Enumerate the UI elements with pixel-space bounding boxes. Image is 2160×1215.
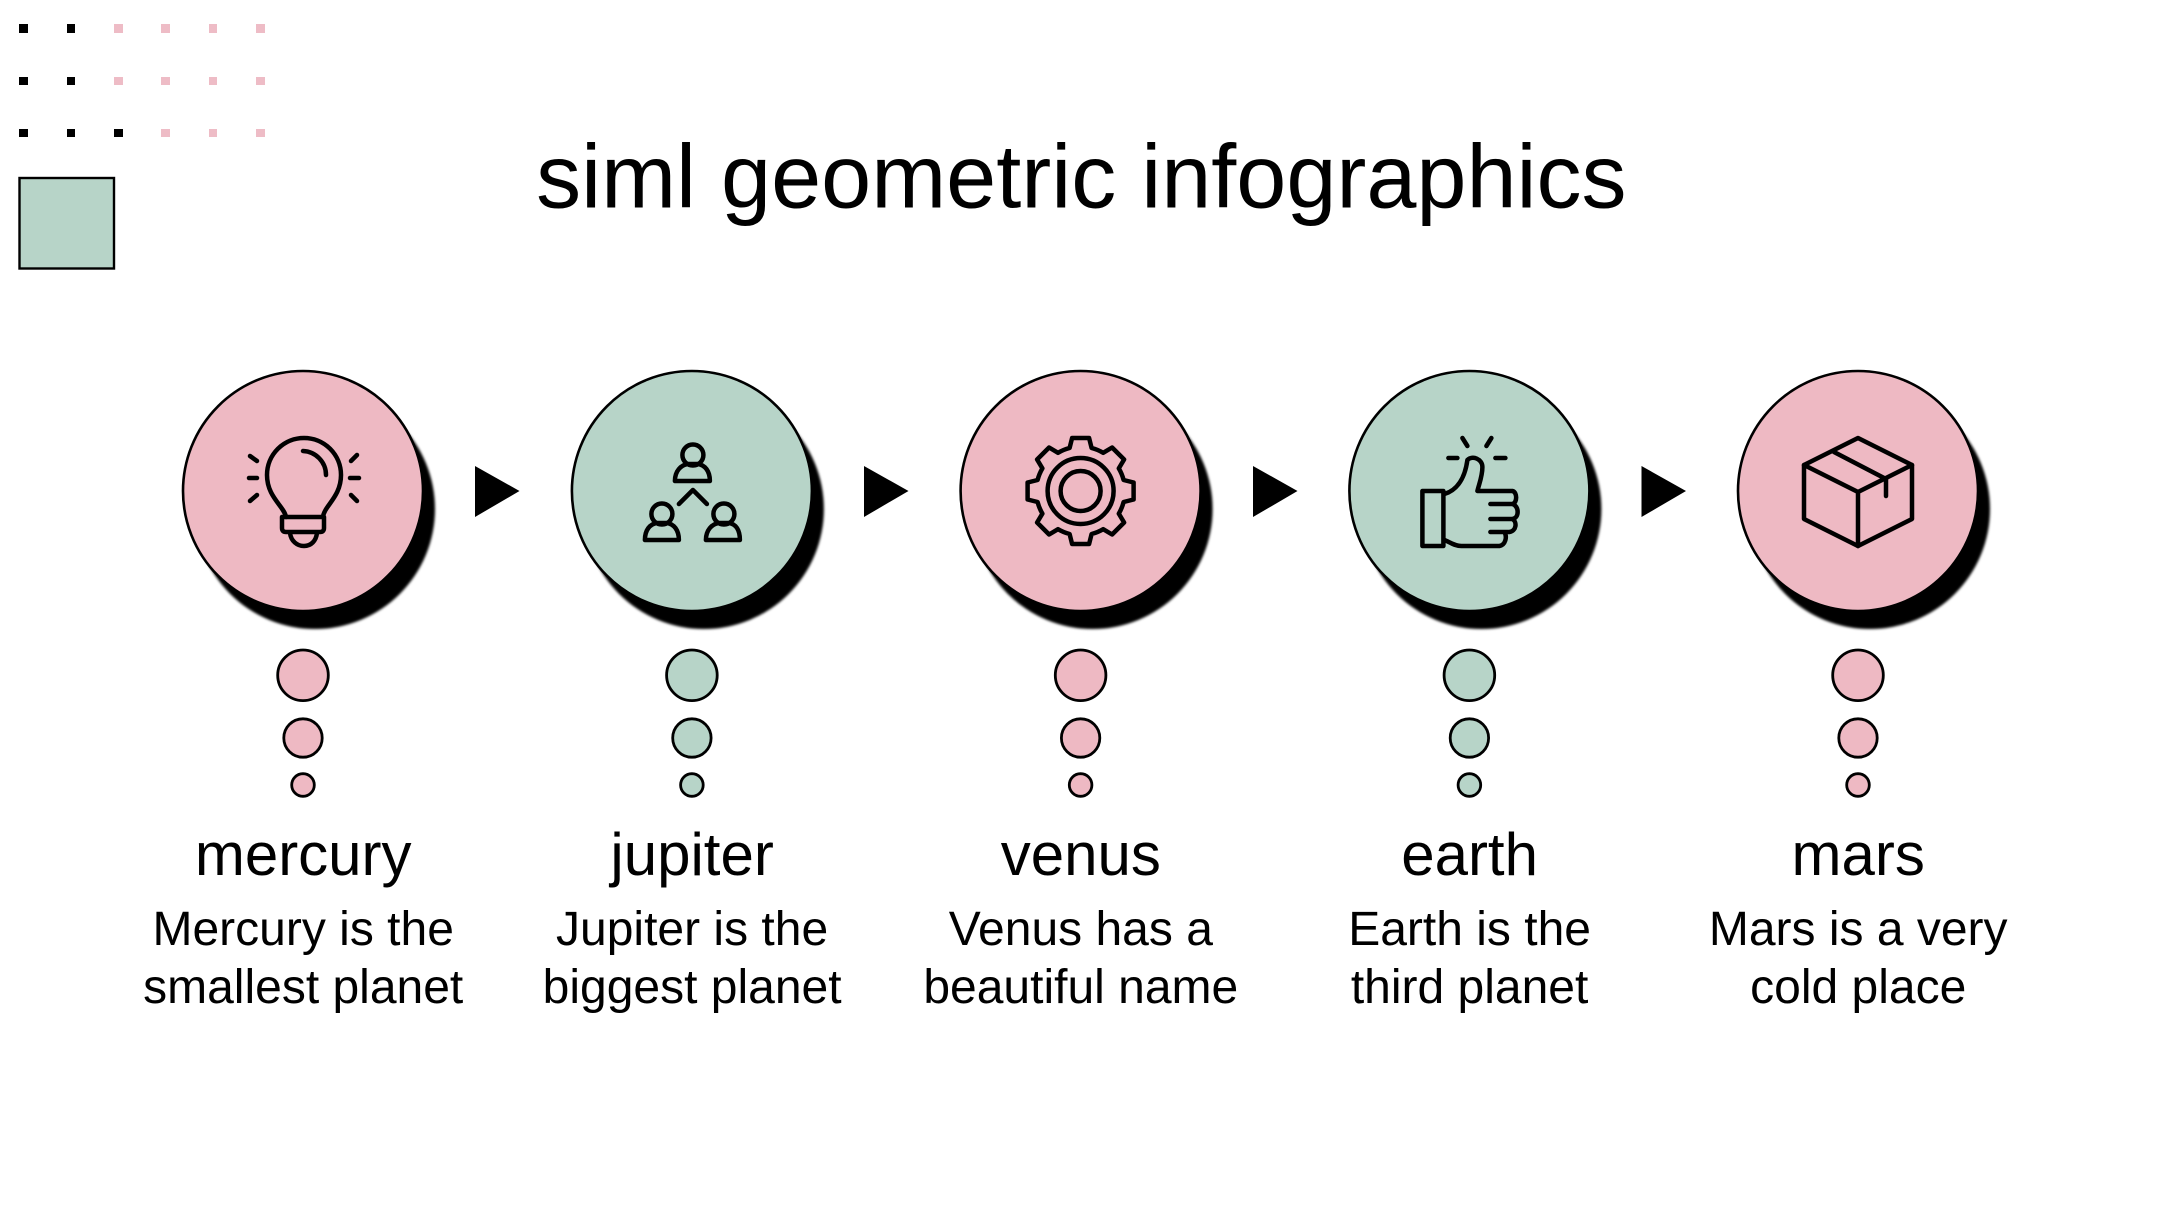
arrow 3 <box>1253 466 1298 517</box>
step: venus <box>961 371 1213 629</box>
step: mars <box>1738 371 1990 629</box>
step: mercury <box>183 371 435 629</box>
dots: mercury <box>278 650 328 796</box>
description: venus: Venus has a <box>949 903 1213 956</box>
venus circle shadow <box>973 389 1213 629</box>
mars circle shadow <box>1750 389 1990 629</box>
icon: people hierarchy <box>645 444 740 540</box>
jupiter circle <box>572 371 812 611</box>
description: jupiter: biggest planet <box>543 961 842 1014</box>
earth circle shadow <box>1361 389 1601 629</box>
description: mars <box>1709 903 2008 1014</box>
arrow 1 <box>475 466 520 517</box>
arrow 4 <box>1642 466 1686 517</box>
step: jupiter <box>572 371 824 629</box>
description: earth <box>1348 903 1591 1014</box>
description: mercury: Mercury is the <box>152 903 454 956</box>
icon: thumbs up <box>1422 438 1518 546</box>
decorative dot grid <box>19 24 265 137</box>
dots: jupiter <box>667 650 717 796</box>
description: mercury <box>143 903 463 1014</box>
dots: earth <box>1444 650 1495 796</box>
decorative green square <box>20 178 114 268</box>
mercury circle shadow <box>195 389 435 629</box>
description: mars: Mars is a very <box>1709 903 2008 956</box>
label: jupiter: jupiter <box>608 821 774 888</box>
step: earth <box>1349 371 1601 629</box>
title: siml geometric infographics <box>536 128 1627 228</box>
jupiter circle shadow <box>584 389 824 629</box>
description: jupiter: Jupiter is the <box>556 903 828 956</box>
description: venus: beautiful name <box>923 961 1238 1014</box>
label: mars: mars <box>1792 821 1925 888</box>
description: venus <box>923 903 1238 1014</box>
mars circle <box>1738 371 1978 611</box>
description: mars: cold place <box>1750 961 1966 1014</box>
venus circle <box>961 371 1201 611</box>
label: mercury: mercury <box>195 821 412 888</box>
earth circle <box>1349 371 1589 611</box>
description: earth: Earth is the <box>1348 903 1591 956</box>
label: venus: venus <box>1001 821 1161 888</box>
icon: gear <box>1028 438 1134 544</box>
description: mercury: smallest planet <box>143 961 463 1014</box>
dots: venus <box>1055 650 1106 796</box>
arrow 2 <box>864 466 908 517</box>
label: earth: earth <box>1401 821 1538 888</box>
description: earth: third planet <box>1351 961 1588 1014</box>
icon: light bulb <box>249 438 359 546</box>
dots: mars <box>1833 650 1883 796</box>
description: jupiter <box>543 903 842 1014</box>
mercury circle <box>183 371 423 611</box>
icon: box <box>1804 438 1912 546</box>
